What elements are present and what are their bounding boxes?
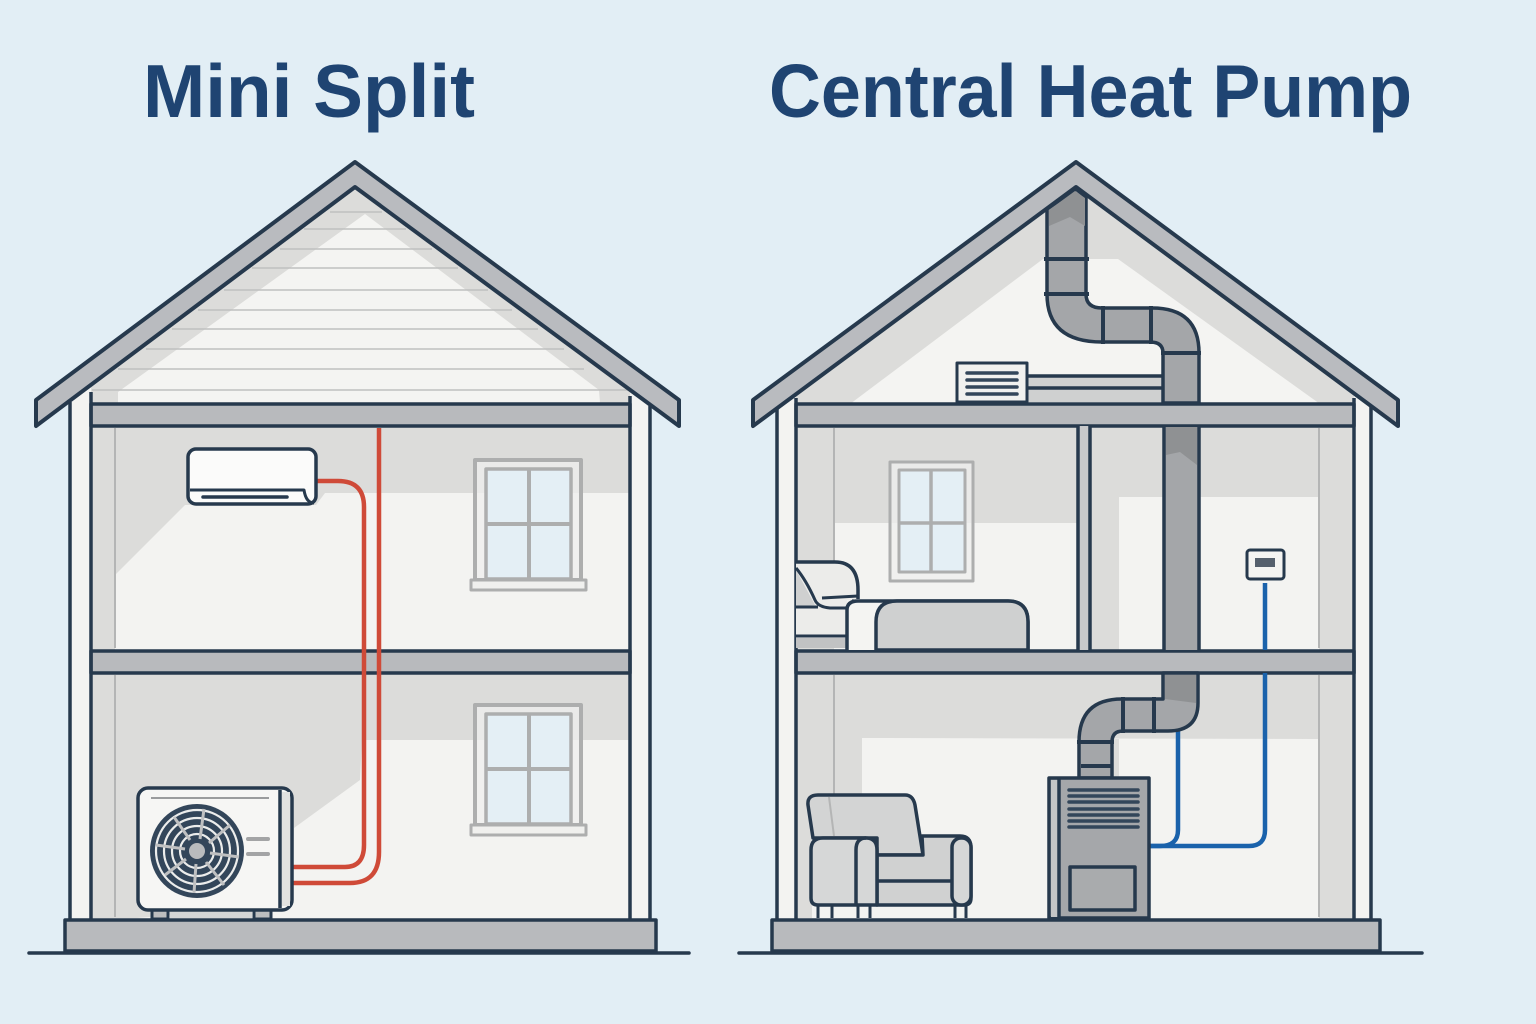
lower window	[471, 705, 586, 835]
lower room wall	[91, 673, 630, 920]
middle floor beam	[91, 651, 630, 673]
attic supply duct	[1044, 189, 1201, 403]
upper room wall	[91, 426, 630, 650]
roof	[753, 162, 1398, 426]
attic floor beam	[796, 404, 1354, 426]
roof	[36, 162, 679, 426]
exterior wall	[70, 385, 650, 920]
attic gable	[796, 187, 1354, 404]
refrigerant lines	[293, 428, 379, 883]
right hall wall	[1090, 426, 1354, 650]
inner wall lines	[796, 398, 1354, 920]
left bedroom wall	[796, 426, 1078, 650]
ground line	[29, 951, 689, 955]
foundation	[65, 920, 656, 951]
attic floor beam	[91, 404, 630, 426]
inner wall lines	[91, 392, 630, 920]
ground line	[739, 951, 1422, 955]
armchair	[808, 795, 971, 918]
bedroom window	[890, 462, 973, 581]
attic gable with siding	[91, 187, 630, 404]
refrigerant lines	[1149, 583, 1265, 846]
foundation	[772, 920, 1380, 951]
fan grille	[150, 804, 244, 898]
title: Central Heat Pump: Central Heat Pump	[769, 49, 1412, 133]
outdoor condenser unit	[138, 788, 292, 919]
indoor wall unit	[188, 449, 316, 504]
riser duct between floors	[1164, 427, 1199, 650]
attic vent grille	[957, 363, 1027, 402]
bed	[796, 562, 1028, 650]
lower room wall	[796, 673, 1354, 920]
furnace	[1049, 778, 1149, 918]
lower duct to furnace	[1077, 673, 1198, 778]
upper window	[471, 460, 586, 590]
attic vent branch duct	[1027, 376, 1163, 402]
panel: mini split house	[29, 162, 689, 953]
panel: central heat pump house	[739, 162, 1422, 953]
partition wall	[1078, 426, 1090, 650]
title: Mini Split: Mini Split	[143, 49, 475, 133]
middle floor beam	[796, 651, 1354, 673]
thermostat	[1247, 550, 1284, 579]
exterior wall	[777, 393, 1371, 920]
